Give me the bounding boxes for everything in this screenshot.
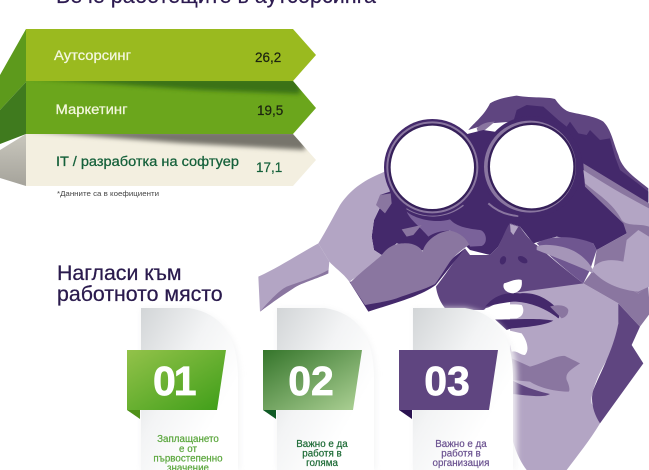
section heading — [57, 261, 223, 306]
card text: работя в — [302, 448, 342, 460]
card text: Заплащането — [157, 434, 219, 445]
number banner 03: 03 — [424, 358, 470, 404]
number banner 02 — [263, 350, 362, 419]
chin shading — [512, 356, 580, 396]
card text: Важно е да — [435, 439, 487, 450]
binoculars — [384, 116, 582, 217]
card text: е от — [179, 444, 197, 455]
section heading: работното място — [57, 282, 223, 306]
card text — [433, 439, 489, 469]
nose highlight — [510, 224, 518, 235]
card text: работя в — [441, 448, 481, 460]
arrow: Маркетинг 19,5 — [0, 78, 316, 144]
card 1 — [127, 308, 240, 470]
number banner 01 — [127, 350, 226, 419]
left forearm — [258, 243, 329, 312]
left hand shadow — [349, 248, 465, 312]
card text: организация — [433, 458, 489, 469]
arrow: IT / разработка на софтуер 17,1 — [0, 131, 316, 186]
arrow: Аутсорсинг 26,2: Аутсорсинг — [54, 48, 131, 63]
nostrils — [499, 254, 529, 265]
lower face mid tone — [436, 223, 583, 310]
neck — [592, 303, 643, 423]
card text: първостепенно — [153, 454, 223, 464]
arrow: Маркетинг 19,5: Маркетинг — [56, 102, 128, 117]
card background — [413, 308, 517, 470]
number banner 03 — [399, 350, 498, 419]
dark face shadow — [372, 130, 627, 255]
card 2 — [263, 308, 376, 470]
hair — [468, 96, 648, 203]
illustration: woman looking through binoculars — [258, 96, 649, 470]
left hand fingers — [350, 231, 472, 305]
cheek and neck mid band — [583, 270, 649, 327]
ranking arrows chart — [0, 29, 316, 198]
right hand — [583, 163, 649, 293]
card background — [141, 308, 240, 470]
left hand — [318, 172, 392, 282]
card 3 — [399, 308, 517, 470]
arrow: Аутсорсинг 26,2: 26,2 — [255, 50, 281, 65]
number banner 02: 02 — [288, 358, 334, 404]
lips — [485, 293, 568, 330]
section heading: Нагласи към — [57, 261, 182, 285]
small finger shade — [402, 225, 422, 237]
card text: Важно е да — [296, 439, 348, 450]
card text: голяма — [306, 458, 338, 469]
teeth and highlights — [485, 280, 527, 355]
arrow: Маркетинг 19,5: 19,5 — [257, 103, 283, 118]
arrow: IT / разработка на софтуер 17,1: 17,1 — [256, 160, 282, 175]
arrow: IT / разработка на софтуер 17,1: IT / разработка на софтуер — [56, 154, 239, 169]
cheek highlight — [537, 237, 597, 283]
finger upper shade — [407, 212, 486, 247]
arrow: Аутсорсинг 26,2 — [0, 29, 316, 110]
number banner 01: 01 — [153, 358, 196, 404]
lower face light — [510, 283, 619, 470]
card background — [277, 308, 376, 470]
card text — [153, 434, 223, 470]
footnote: *Данните са в коефициенти — [57, 189, 159, 198]
card text — [296, 439, 348, 469]
